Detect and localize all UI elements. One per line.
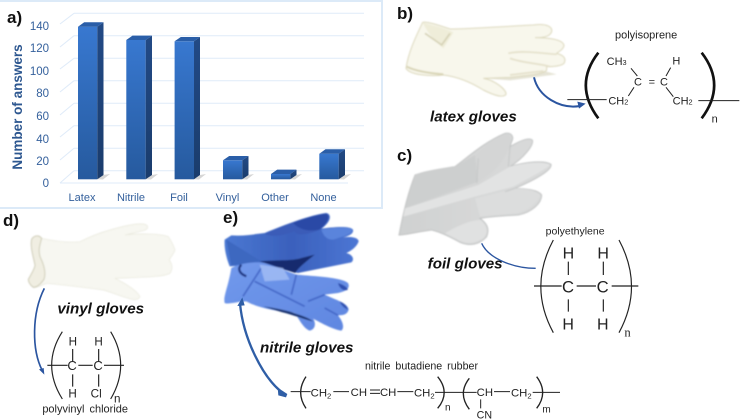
bar: Vinyl 18 — [223, 156, 254, 180]
bar: Other 6 — [271, 170, 302, 180]
chemical structure: polyisoprene: CH2 — [608, 96, 628, 108]
chemical structure: nitrile butadiene rubber: CH — [380, 387, 396, 399]
chemical structure: nitrile butadiene rubber: nitrile butadiene rubber — [365, 360, 478, 372]
chemical structure: nitrile butadiene rubber: CH — [351, 387, 367, 399]
panel b: latex gloves — [397, 4, 739, 126]
chemical structure: polyethylene: H — [562, 316, 574, 333]
arrow to polyethylene — [482, 243, 536, 268]
chemical structure: polyvinyl chloride: C — [67, 358, 77, 373]
chemical structure: polyethylene: H — [563, 245, 574, 262]
panel label c: c) — [397, 146, 412, 165]
glove name: foil gloves: foil gloves — [428, 255, 503, 272]
photo: latex glove — [406, 22, 565, 96]
bar: Foil 124 — [175, 37, 206, 180]
chemical structure: polyisoprene: polyisoprene — [615, 29, 677, 41]
panel label a: a) — [7, 8, 22, 27]
x axis category labels: Nitrile — [117, 192, 145, 204]
panel label b: b) — [397, 4, 413, 23]
bar: None 24 — [319, 149, 351, 180]
chemical structure: nitrile butadiene rubber: 2 — [527, 392, 532, 401]
panel d: vinyl gloves — [3, 211, 175, 416]
x axis category labels: Foil — [170, 192, 188, 204]
y axis tick labels — [30, 21, 49, 190]
chemical structure: nitrile butadiene rubber: m — [542, 405, 551, 416]
bar: Latex 137 — [78, 22, 110, 179]
panel label d: d) — [3, 211, 19, 230]
chemical structure: polyethylene: H — [597, 316, 609, 333]
x axis category labels: Vinyl — [216, 192, 239, 204]
photo: vinyl glove — [28, 224, 175, 300]
glove name: nitrile gloves: nitrile gloves — [260, 340, 353, 357]
x axis category labels — [69, 192, 337, 204]
chemical structure: polyethylene: C — [597, 278, 609, 297]
chemical structure: polyisoprene: C — [634, 77, 642, 89]
panel e: nitrile gloves — [223, 208, 560, 419]
chemical structure: polyethylene: polyethylene — [546, 226, 605, 237]
chemical structure: nitrile butadiene rubber: CH — [311, 388, 327, 400]
x axis category labels: Latex — [69, 192, 96, 204]
x axis category labels: Other — [261, 192, 289, 204]
chemical structure: polyvinyl chloride: H — [94, 336, 103, 349]
y axis tick labels: 40 — [36, 134, 49, 146]
chemical structure: polyisoprene: n — [712, 114, 718, 126]
panel c: foil gloves — [397, 133, 638, 340]
photo: nitrile gloves — [224, 213, 359, 331]
chemical structure: polyethylene: H — [597, 245, 609, 262]
chemical structure: polyvinyl chloride: C — [93, 358, 103, 373]
chemical structure: nitrile butadiene rubber: n — [445, 403, 451, 414]
y axis tick labels: 120 — [30, 43, 49, 55]
y axis tick labels: 20 — [36, 156, 49, 168]
glove name: vinyl gloves: vinyl gloves — [57, 300, 144, 317]
chemical structure: polyethylene: C — [562, 278, 574, 297]
chemical structure: polyisoprene: H — [672, 55, 680, 67]
panel a: bar chart of glove use — [0, 1, 382, 208]
arrow to nitrile butadiene rubber — [237, 297, 287, 397]
chemical structure: nitrile butadiene rubber: 2 — [430, 392, 435, 401]
chemical structure: nitrile butadiene rubber: CH — [511, 388, 527, 400]
chemical structure: polyvinyl chloride — [42, 332, 128, 416]
chemical structure: polyisoprene: CH3 — [607, 56, 627, 68]
chemical structure: polyvinyl chloride: Cl — [91, 387, 102, 400]
photo: foil glove — [399, 133, 551, 244]
y axis title: Number of answers — [10, 44, 25, 170]
chemical structure: polyvinyl chloride: n — [114, 392, 120, 405]
chemical structure: nitrile butadiene rubber — [291, 360, 560, 419]
chemical structure: nitrile butadiene rubber: CH — [414, 388, 430, 400]
y axis tick labels: 60 — [36, 111, 49, 123]
arrow to polyvinyl chloride — [35, 288, 44, 375]
chemical structure: polyisoprene — [567, 29, 739, 126]
chemical structure: polyvinyl chloride: H — [68, 387, 77, 400]
y axis tick labels: 100 — [30, 66, 49, 78]
chemical structure: polyisoprene: C — [660, 77, 668, 89]
glove name: latex gloves: latex gloves — [430, 109, 517, 126]
chemical structure: polyethylene: n — [624, 326, 631, 340]
chemical structure: nitrile butadiene rubber: 2 — [327, 392, 331, 401]
chemical structure: polyvinyl chloride: polyvinyl chloride — [42, 404, 128, 416]
panel label e: e) — [223, 208, 238, 227]
chemical structure: polyethylene — [534, 226, 638, 340]
y axis tick labels: 140 — [30, 21, 49, 33]
chemical structure: polyisoprene: CH2 — [673, 96, 693, 108]
chemical structure: polyvinyl chloride: H — [69, 336, 77, 349]
y axis tick labels: 0 — [43, 178, 49, 190]
arrow to polyisoprene — [534, 77, 586, 109]
y axis tick labels: 80 — [36, 88, 49, 100]
x axis category labels: None — [310, 192, 337, 204]
chemical structure: nitrile butadiene rubber: CH — [477, 387, 493, 399]
bar: Nitrile 125 — [126, 36, 158, 179]
chemical structure: polyisoprene: = — [649, 77, 655, 89]
